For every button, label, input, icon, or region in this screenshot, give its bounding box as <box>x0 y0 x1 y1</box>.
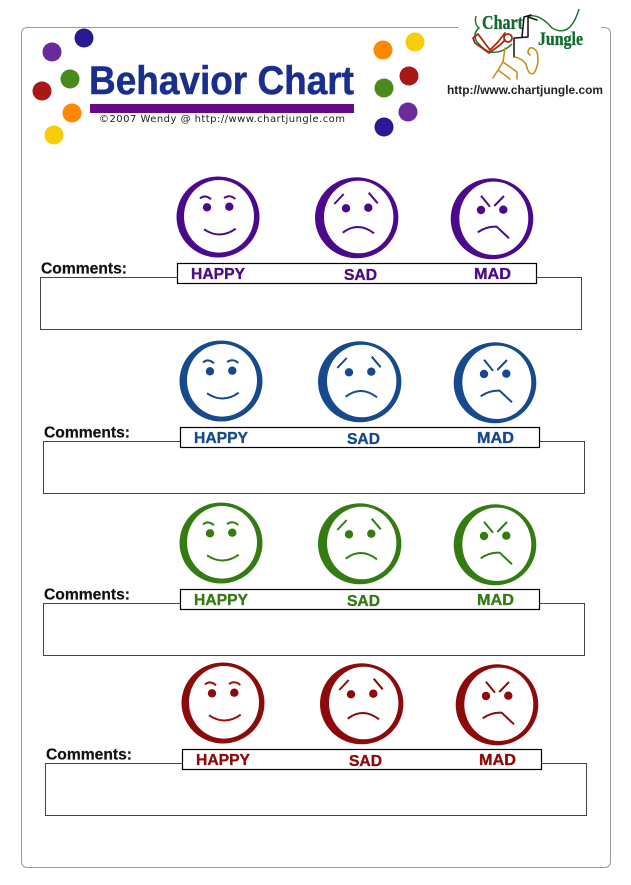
label bar <box>178 264 536 284</box>
happy face <box>182 662 264 744</box>
decorative dots: left cluster <box>32 28 94 144</box>
row 2: blue faces <box>44 340 584 494</box>
label: mad: MAD <box>477 430 514 447</box>
label: mad: MAD <box>479 752 516 769</box>
logo wordmark: Chart: Chart <box>482 12 523 34</box>
happy face <box>180 502 262 584</box>
comments box <box>44 604 584 656</box>
logo URL: http://www.chartjungle.com <box>447 83 603 97</box>
row 4: red faces <box>46 662 586 816</box>
mad face <box>454 342 536 423</box>
label: sad: SAD <box>344 267 377 284</box>
comments label: Comments: <box>41 260 127 278</box>
comments box <box>46 764 586 816</box>
label: happy: HAPPY <box>191 266 245 283</box>
sad face <box>318 341 401 422</box>
copyright line: ©2007 Wendy @ http://www.chartjungle.com <box>99 114 345 125</box>
comments box <box>44 442 584 494</box>
comments label: Comments: <box>44 586 130 604</box>
label: sad: SAD <box>349 753 382 770</box>
label bar <box>182 750 542 770</box>
label: sad: SAD <box>347 431 380 448</box>
label: mad: MAD <box>474 266 511 283</box>
mad face <box>456 664 538 745</box>
label bar <box>180 428 540 448</box>
label: happy: HAPPY <box>196 752 250 769</box>
label: happy: HAPPY <box>194 430 248 447</box>
comments box <box>40 278 582 330</box>
label bar <box>180 590 540 610</box>
mad face <box>451 178 533 259</box>
mad face <box>454 504 536 585</box>
Chart Jungle logo <box>473 9 583 79</box>
title underline bar <box>90 104 354 113</box>
happy face <box>180 340 262 422</box>
sad face <box>320 663 403 744</box>
decorative dots: right cluster <box>374 32 424 136</box>
logo vine <box>475 9 579 52</box>
label: mad: MAD <box>477 592 514 609</box>
logo monkey <box>473 15 538 79</box>
label: sad: SAD <box>347 593 380 610</box>
sad face <box>318 503 401 584</box>
title: Behavior Chart <box>89 59 354 103</box>
row 1: purple faces <box>40 176 582 330</box>
row 3: green faces <box>44 502 584 656</box>
comments label: Comments: <box>44 424 130 442</box>
label: happy: HAPPY <box>194 592 248 609</box>
sad face <box>315 177 398 258</box>
logo wordmark: Jungle: Jungle <box>538 29 583 50</box>
happy face <box>176 176 260 258</box>
comments label: Comments: <box>46 746 132 764</box>
